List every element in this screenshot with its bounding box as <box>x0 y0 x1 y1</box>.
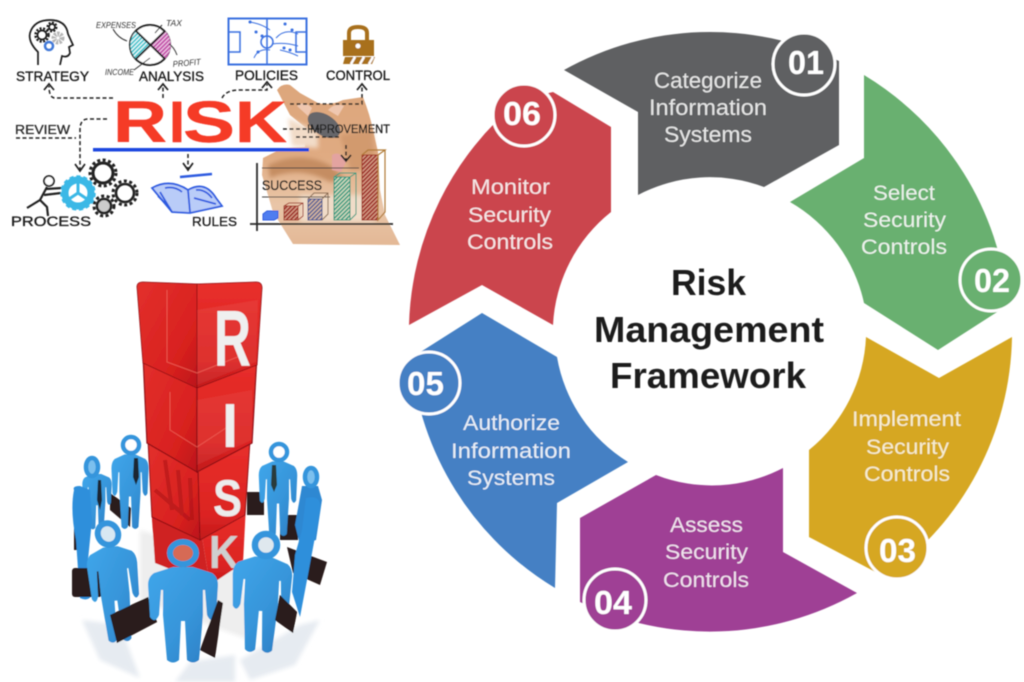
badge 05: 05 <box>407 365 444 402</box>
badge 04: 04 <box>594 584 633 621</box>
figure: back right <box>259 444 297 536</box>
arrow heads <box>44 82 367 171</box>
label: expenses: EXPENSES <box>96 20 136 30</box>
figure: back left <box>111 437 149 529</box>
red cube: s <box>148 440 250 540</box>
badge 02 <box>960 249 1022 311</box>
label: categorize information systems: Systems <box>664 122 752 147</box>
label: categorize information systems: Categorize <box>654 68 762 93</box>
segment 01: categorize <box>564 32 839 195</box>
letter i: I <box>222 392 238 461</box>
label: monitor security controls: Monitor <box>471 176 550 199</box>
label: select security controls: Security <box>863 209 947 232</box>
label: monitor security controls: Security <box>468 204 552 227</box>
red cube: i <box>143 355 257 472</box>
label: review: REVIEW <box>15 123 70 137</box>
badge 04 <box>584 569 646 631</box>
label: analysis: ANALYSIS <box>139 68 204 84</box>
red cube: r <box>137 282 262 388</box>
label: profit: PROFIT <box>172 57 202 69</box>
figure: left <box>82 458 112 529</box>
label: policies: POLICIES <box>235 67 298 83</box>
figure: front left <box>85 519 157 645</box>
illustration: risk cubes and business people <box>72 282 327 682</box>
label: income: INCOME <box>105 67 134 77</box>
label: authorize information systems: Information <box>451 440 571 463</box>
title: risk management framework: Framework <box>610 355 807 396</box>
heading: risk: I <box>169 90 185 155</box>
label: select security controls: Controls <box>861 236 947 259</box>
label: tax: TAX <box>166 18 182 28</box>
illustration: risk strategy doodle <box>11 18 400 245</box>
briefcases front <box>72 568 297 643</box>
label: categorize information systems: Information <box>649 95 767 120</box>
briefcase: front centre <box>200 600 223 658</box>
title: risk management framework: Management <box>594 309 824 350</box>
briefcases behind <box>74 492 298 550</box>
label: authorize information systems: Systems <box>467 467 555 490</box>
label: assess security controls: Security <box>665 541 749 564</box>
letter r: R <box>214 294 251 383</box>
icon: policies playbook field <box>228 18 307 65</box>
badge 06: 06 <box>503 95 541 132</box>
letter s: S <box>213 470 242 528</box>
title: risk management framework: Risk <box>671 262 747 303</box>
label: implement security controls: Implement <box>852 408 961 431</box>
badge 05 <box>398 352 460 414</box>
heading: risk: R <box>113 90 167 155</box>
badge 01: 01 <box>788 44 824 81</box>
segment 02: select <box>790 75 1008 350</box>
figure: front centre <box>148 542 218 662</box>
figure: front right <box>229 534 297 654</box>
label: rules: RULES <box>192 214 237 229</box>
label: implement security controls: Security <box>866 436 950 459</box>
figure: far left <box>72 486 92 599</box>
badge 02: 02 <box>974 262 1010 299</box>
blue underline <box>93 148 309 152</box>
badge 03: 03 <box>879 532 916 569</box>
figure: far right <box>292 497 320 617</box>
briefcase: far right <box>287 547 327 585</box>
label: control: CONTROL <box>326 67 390 83</box>
segment 06: monitor <box>409 92 611 325</box>
label: monitor security controls: Controls <box>467 231 553 254</box>
badge 06 <box>493 84 555 146</box>
label: implement security controls: Controls <box>864 463 950 486</box>
label: assess security controls: Controls <box>663 569 749 592</box>
segment 05: authorize <box>411 313 628 588</box>
bar chart: success <box>250 150 393 231</box>
icon: strategy head with gears <box>30 20 73 65</box>
label: improvement: IMPROVEMENT <box>307 122 391 136</box>
label: process: PROCESS <box>11 213 91 229</box>
label: success: SUCCESS <box>262 178 322 193</box>
badge 01 <box>773 33 835 95</box>
segment 04: assess <box>580 468 857 632</box>
figure: right <box>295 468 322 545</box>
label: assess security controls: Assess <box>670 514 743 537</box>
reflection of people on cube <box>155 460 192 520</box>
icon: open rule book <box>152 174 222 213</box>
marker pen <box>303 107 345 143</box>
floor reflections <box>82 530 320 682</box>
letter k: K <box>209 526 239 578</box>
hand drawing on the board <box>262 85 400 245</box>
heading: risk: S <box>183 90 235 155</box>
icon: person pushing gears <box>27 160 137 216</box>
diagram: risk management framework cycle <box>398 32 1022 632</box>
icon: analysis pie <box>113 25 177 70</box>
segment 03: implement <box>809 337 1012 577</box>
icon: control padlock <box>343 27 375 64</box>
label: authorize information systems: Authorize <box>463 412 560 435</box>
heading: risk: K <box>235 90 287 155</box>
red cube: k <box>151 505 246 585</box>
dashed connector arrows <box>16 84 362 170</box>
badge 03 <box>866 517 928 579</box>
label: strategy: STRATEGY <box>16 68 90 84</box>
label: select security controls: Select <box>873 182 935 205</box>
